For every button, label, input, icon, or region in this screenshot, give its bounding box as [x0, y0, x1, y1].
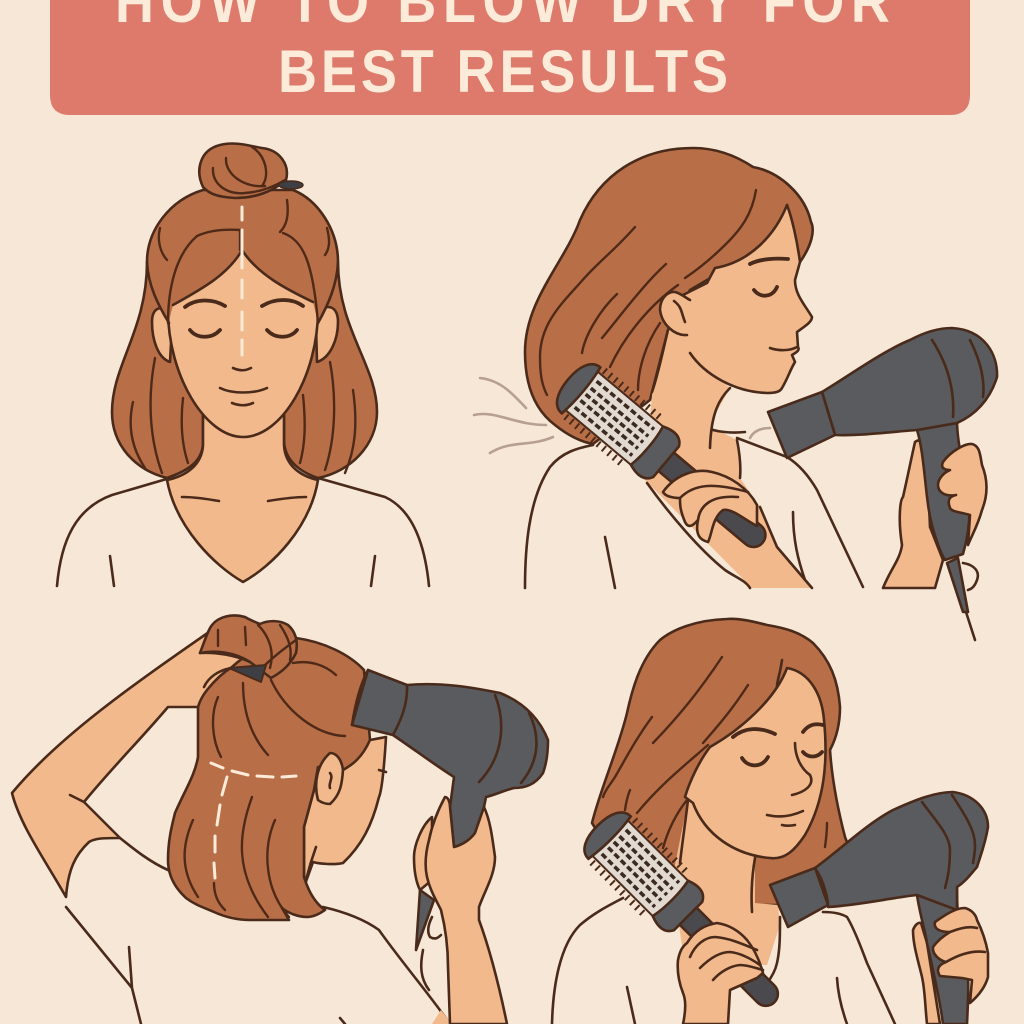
face — [681, 205, 812, 393]
shirt crease — [605, 512, 805, 588]
hair dryer — [770, 792, 988, 1024]
shirt — [66, 838, 450, 1024]
raised arm — [12, 632, 250, 897]
shirt — [525, 438, 863, 588]
neck outlines — [680, 800, 780, 983]
hair clip — [229, 665, 266, 682]
neck and chest — [672, 800, 780, 965]
hand finger lines — [690, 937, 763, 980]
face outline — [683, 205, 812, 393]
nose and mouth — [220, 368, 267, 405]
mouth — [770, 347, 797, 350]
nose and mouth — [767, 743, 811, 826]
panel: step 4 finishing front three-quarter view — [552, 619, 988, 1024]
dryer handle and cord — [416, 890, 441, 990]
hair strands — [540, 190, 756, 395]
face — [685, 668, 826, 858]
hair — [592, 619, 850, 905]
hair strands — [185, 662, 345, 917]
underarm crease — [70, 795, 84, 802]
hair — [168, 638, 370, 920]
parting line — [777, 660, 782, 687]
hair dryer — [352, 670, 548, 847]
shirt outline — [552, 898, 895, 1024]
dryer hand — [933, 908, 988, 1003]
hand finger lines — [680, 486, 748, 520]
hair strands — [603, 657, 827, 848]
hair — [525, 148, 813, 444]
brush hand — [663, 471, 757, 542]
dryer hand and arm — [414, 797, 507, 1024]
ear — [316, 753, 343, 804]
shirt crease — [340, 1018, 345, 1024]
title banner: BEST RESULTS — [278, 38, 728, 106]
section dashes — [211, 763, 296, 878]
shirt — [57, 478, 429, 586]
brows and eyes — [185, 300, 303, 337]
round brush — [576, 804, 796, 1024]
face — [168, 232, 318, 437]
parting dashes — [240, 207, 244, 355]
front hair — [149, 193, 336, 323]
hair dryer — [768, 328, 997, 588]
collarbones — [182, 497, 306, 501]
neck and forearm skin — [645, 300, 812, 588]
dryer hand finger lines — [946, 927, 985, 962]
hair bun — [200, 615, 297, 678]
shirt outline — [66, 838, 450, 1024]
bun strands — [213, 147, 285, 193]
panel: step 1 sectioning hair front view — [57, 143, 429, 586]
panel: step 2 brushing with dryer side view — [474, 148, 997, 640]
panel: step 3 back view sectioning — [12, 615, 548, 1024]
ear — [660, 292, 690, 335]
ear fold — [674, 301, 685, 322]
round brush — [549, 356, 782, 566]
jaw and brow marks — [304, 770, 386, 887]
hair back — [112, 190, 377, 478]
dryer cord — [947, 558, 978, 640]
brush hand — [678, 923, 763, 1024]
brows and eyes — [733, 724, 823, 765]
bun strands — [218, 625, 296, 668]
hand fingers near clip — [200, 652, 250, 687]
hair clip — [279, 181, 303, 189]
shirt creases — [110, 556, 375, 586]
dryer hand — [938, 444, 986, 545]
hair bun — [199, 143, 287, 198]
neck and chest — [167, 410, 318, 582]
ears — [152, 308, 172, 362]
ear fold — [330, 773, 331, 788]
title banner — [50, 0, 970, 115]
shirt outline — [525, 438, 863, 588]
face — [304, 737, 386, 887]
hairline — [147, 250, 338, 323]
motion lines — [474, 378, 770, 453]
chest skin sliver — [432, 1010, 452, 1024]
hair strands — [131, 200, 355, 473]
shirt — [552, 898, 895, 1024]
neck outlines — [647, 330, 812, 588]
face details — [750, 259, 788, 296]
